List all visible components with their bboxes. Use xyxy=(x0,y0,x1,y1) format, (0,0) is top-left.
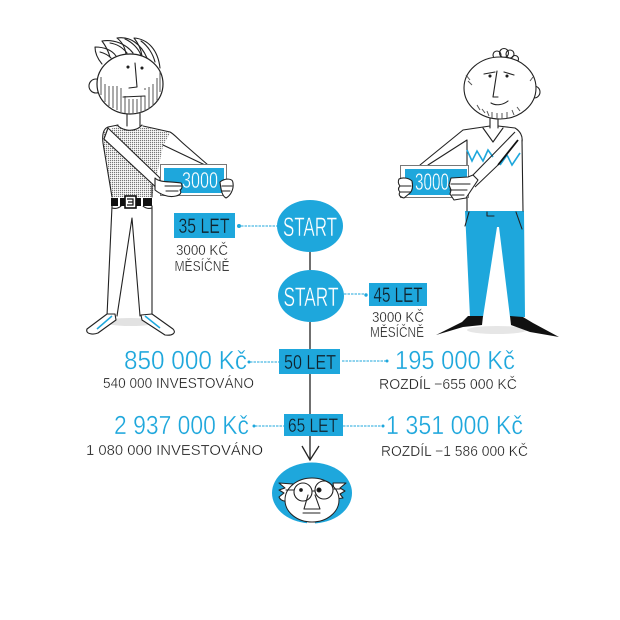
left man, invests from age 35 xyxy=(87,38,233,335)
belt buckle xyxy=(118,196,143,208)
start circle, age 45: START xyxy=(284,282,338,312)
monthly amount, left xyxy=(174,242,230,275)
left black shoe xyxy=(436,316,483,335)
arm xyxy=(473,132,515,175)
monthly amount, left: MĚSÍČNĚ xyxy=(174,258,230,275)
beard xyxy=(466,75,533,119)
ground shadow xyxy=(104,318,158,326)
age 65 box: 65 LET xyxy=(288,416,338,437)
monthly amount, right: MĚSÍČNĚ xyxy=(370,324,424,341)
sweater zigzag xyxy=(467,150,520,165)
start circle, age 35 xyxy=(277,200,343,252)
arrow head xyxy=(302,446,319,460)
right shoe trim xyxy=(145,316,160,328)
arm xyxy=(104,128,160,191)
card xyxy=(160,164,226,196)
neck xyxy=(127,112,140,126)
right man, invests from age 45 xyxy=(398,48,559,337)
card amount: 3000 xyxy=(415,169,449,196)
nose and mouth xyxy=(303,495,320,513)
blue trousers xyxy=(465,211,525,317)
amount right 65: 1 351 000 Kč xyxy=(386,410,523,440)
monthly amount, right xyxy=(370,309,424,341)
face features xyxy=(123,63,145,97)
side hair xyxy=(279,483,346,501)
beard hatching xyxy=(101,72,160,114)
monthly amount, left: 3000 KČ xyxy=(176,242,228,259)
monthly amount, right: 3000 KČ xyxy=(372,309,424,326)
card xyxy=(400,166,468,198)
blue circle xyxy=(272,462,352,524)
ground shadow xyxy=(467,326,527,334)
lower arm line xyxy=(475,165,498,187)
connectors 65 xyxy=(252,424,384,428)
face xyxy=(285,478,339,522)
connector 35 xyxy=(237,224,277,228)
amount left 65: 2 937 000 Kč xyxy=(114,410,249,440)
face features xyxy=(484,71,514,105)
start circle, age 35: START xyxy=(283,212,337,242)
timeline spine xyxy=(309,252,311,460)
arm shadow line xyxy=(498,140,518,165)
ear xyxy=(528,86,540,98)
hand left xyxy=(155,178,182,197)
neck xyxy=(490,116,498,128)
legs xyxy=(107,206,152,316)
connector 45 xyxy=(344,293,368,297)
left shoe trim xyxy=(97,316,112,329)
hand right xyxy=(449,175,478,200)
head xyxy=(97,54,163,114)
retiree portrait xyxy=(272,462,352,524)
belt xyxy=(111,198,152,206)
body outline xyxy=(420,126,523,211)
label box 35 LET: 35 LET xyxy=(178,215,230,238)
hand right xyxy=(220,179,233,198)
connectors 50 xyxy=(248,360,388,364)
trouser details xyxy=(465,212,522,229)
difference right 50: ROZDÍL −655 000 KČ xyxy=(379,376,517,393)
t-shirt xyxy=(103,126,170,197)
label box 45 LET: 45 LET xyxy=(374,284,423,307)
pockets xyxy=(112,206,152,208)
ear xyxy=(89,79,103,93)
head xyxy=(464,57,536,119)
t-shirt outline xyxy=(103,125,208,197)
card amount: 3000 xyxy=(182,167,218,193)
age 50 box: 50 LET xyxy=(284,352,336,374)
start circle, age 45 xyxy=(278,270,344,322)
amount left 50: 850 000 Kč xyxy=(124,345,247,375)
difference right 65: ROZDÍL −1 586 000 KČ xyxy=(381,443,528,460)
mouth area xyxy=(122,90,146,96)
neck xyxy=(307,516,315,524)
hand left xyxy=(398,178,413,198)
left shoe xyxy=(87,314,116,334)
invested left 65: 1 080 000 INVESTOVÁNO xyxy=(86,442,263,459)
invested left 50: 540 000 INVESTOVÁNO xyxy=(103,375,254,392)
amount right 50: 195 000 Kč xyxy=(395,345,515,375)
glasses xyxy=(286,481,340,501)
hair xyxy=(95,38,160,68)
curly hair xyxy=(493,48,518,62)
right shoe xyxy=(141,314,174,335)
right black shoe xyxy=(510,316,559,337)
